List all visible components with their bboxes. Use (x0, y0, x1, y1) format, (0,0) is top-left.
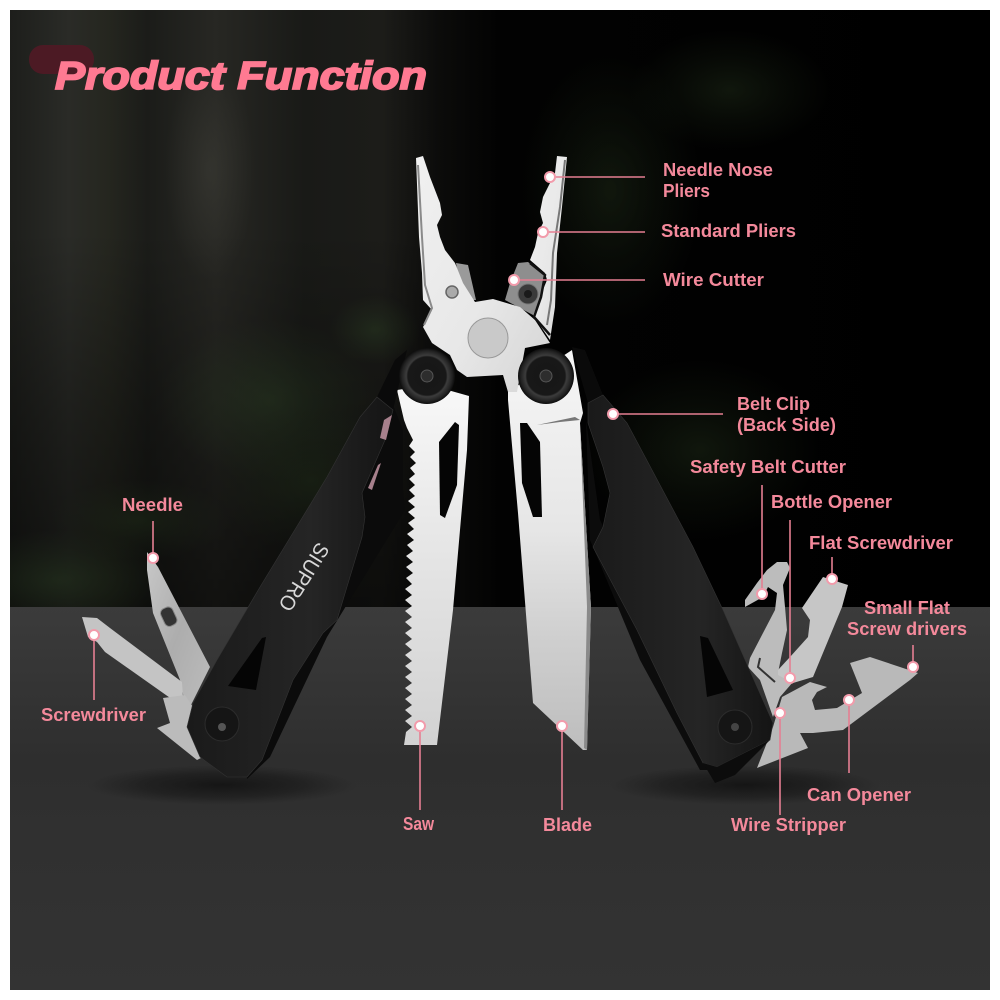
right jaw (530, 156, 567, 340)
title: Product Function (55, 55, 427, 98)
callout: needle nose pliers (545, 160, 773, 201)
callout: wire cutter: Wire Cutter (663, 270, 764, 290)
dark table surface (10, 607, 990, 990)
callout: needle: Needle (122, 495, 183, 515)
callout: belt clip (608, 394, 836, 435)
callout: saw: Saw (403, 814, 435, 834)
callout: bottle opener (771, 492, 892, 683)
callout: can opener (807, 695, 911, 805)
callout: needle nose pliers: Pliers (663, 181, 710, 201)
callout: standard pliers (538, 221, 796, 241)
can opener and small drivers (757, 657, 918, 768)
callout: can opener: Can Opener (807, 785, 911, 805)
callout: blade (543, 721, 592, 835)
cutter screw (518, 284, 538, 304)
callout: wire stripper: Wire Stripper (731, 815, 846, 835)
callout: flat screwdriver: Flat Screwdriver (809, 533, 953, 553)
callout: small flat screw drivers: Small Flat (864, 598, 950, 618)
callout: blade: Blade (543, 815, 592, 835)
callout: small flat screw drivers: Screw drivers (847, 619, 967, 639)
callout: bottle opener: Bottle Opener (771, 492, 892, 512)
callout: standard pliers: Standard Pliers (661, 221, 796, 241)
title (29, 45, 427, 98)
pivot (468, 318, 508, 358)
needle tool (147, 552, 210, 713)
screwdriver tool (82, 617, 183, 700)
saw (397, 385, 469, 745)
callout: screwdriver (41, 630, 146, 725)
left handle (187, 350, 407, 779)
blurred forest background (0, 10, 990, 630)
right handle (572, 347, 773, 783)
blade (508, 350, 591, 750)
callout: safety belt cutter: Safety Belt Cutter (690, 457, 846, 477)
pliers (416, 156, 567, 392)
brand: SIUPRO (273, 538, 333, 615)
left tools (82, 552, 210, 760)
wire cutter insert (505, 262, 545, 315)
callout: flat screwdriver (809, 533, 953, 584)
callout: wire cutter (509, 270, 764, 290)
lower blade tool (157, 695, 203, 760)
flat screwdriver (778, 577, 848, 683)
callout: needle nose pliers: Needle Nose (663, 160, 773, 180)
callout: safety belt cutter (690, 457, 846, 599)
callout: needle (122, 495, 183, 563)
left jaw and head (416, 156, 550, 392)
belt cutter and bottle opener (745, 562, 793, 717)
right tools (745, 562, 918, 768)
callout: belt clip: Belt Clip (737, 394, 810, 414)
callout: belt clip: (Back Side) (737, 415, 836, 435)
callout: small flat screw drivers (847, 598, 967, 672)
callout: wire stripper (731, 708, 846, 835)
multitool (82, 156, 918, 783)
callout: saw (403, 721, 435, 834)
right roller (518, 348, 574, 404)
callout: screwdriver: Screwdriver (41, 705, 146, 725)
left roller (399, 348, 455, 404)
